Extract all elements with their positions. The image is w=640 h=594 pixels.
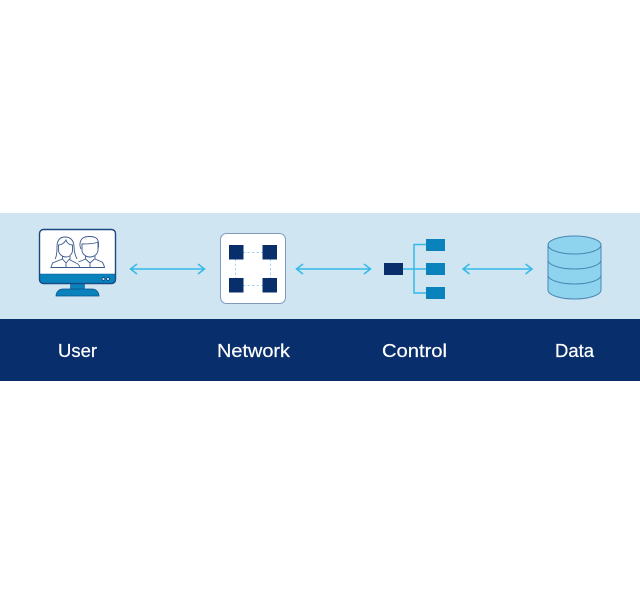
icon: monitor with two users (40, 230, 116, 296)
label: Data: Data (555, 340, 595, 361)
icon: network nodes card (220, 234, 286, 304)
arrow: user to network (130, 264, 204, 274)
arrow: network to control (296, 264, 370, 274)
icon: man outline (78, 236, 104, 268)
label: Control: Control (382, 340, 447, 361)
icon: control hierarchy (384, 239, 445, 299)
panel: navy label band (0, 319, 640, 381)
label: Network: Network (217, 340, 291, 361)
label: User: User (58, 340, 97, 361)
icon: woman outline (51, 237, 80, 268)
panel: light blue icon band (0, 213, 640, 319)
icon: database cylinder (548, 236, 601, 299)
arrow: control to data (463, 264, 532, 274)
